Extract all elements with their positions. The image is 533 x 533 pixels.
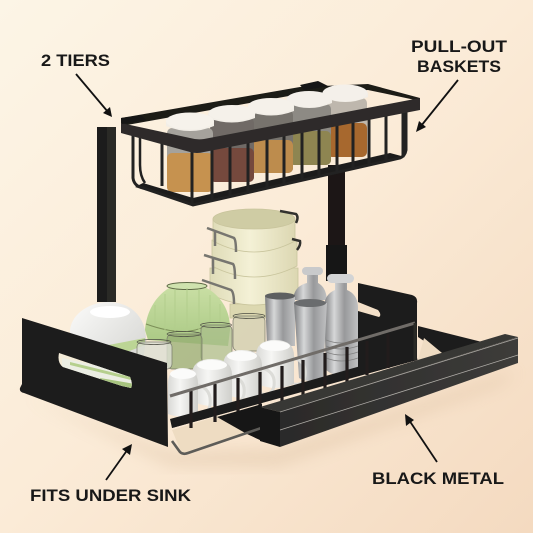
cup 2 <box>192 359 244 406</box>
upper basket bracket <box>121 115 146 124</box>
pot handles <box>202 211 300 304</box>
stacked cream pots <box>202 209 300 318</box>
label: pull-out baskets <box>411 37 508 132</box>
upper basket front rim <box>121 98 420 153</box>
left post <box>97 127 116 302</box>
arrow: black metal <box>405 414 437 462</box>
glass 4 <box>233 314 265 351</box>
cup 1 <box>168 368 210 417</box>
label: black metal <box>372 414 504 488</box>
green ribbed bowl <box>145 282 230 346</box>
lower basket back panel <box>358 283 417 376</box>
white cups <box>168 340 305 417</box>
jar 3 <box>248 98 294 173</box>
pull-out handle bar <box>172 425 270 454</box>
shaker front <box>324 274 358 376</box>
back panel handle cut-out <box>358 302 380 317</box>
white bowl <box>70 302 146 380</box>
floor liner beneath basket <box>172 416 270 454</box>
arrow: pull-out baskets <box>416 80 458 132</box>
front drawer bar <box>260 334 518 447</box>
jar 2 <box>208 105 256 182</box>
top rail <box>170 323 415 396</box>
lower basket dark floor <box>170 350 417 428</box>
glass 2 <box>167 332 202 369</box>
jar 5 <box>322 84 368 157</box>
pot 1 <box>213 209 295 252</box>
label: fits under sink <box>30 444 192 505</box>
floor shadow <box>25 370 518 465</box>
glass 1 <box>137 340 172 369</box>
label: 2 tiers: 2 TIERS <box>41 51 110 70</box>
cup 3 <box>223 350 274 398</box>
lower under-rail dark block <box>217 404 262 441</box>
label: pull-out baskets: BASKETS <box>417 57 501 76</box>
lower wire basket <box>170 323 417 428</box>
upper basket jars <box>166 84 368 192</box>
product: two-tier rack <box>20 81 518 454</box>
upper basket wire cage <box>133 108 406 205</box>
label: 2 tiers <box>41 51 112 117</box>
right post <box>326 165 347 281</box>
label: fits under sink: FITS UNDER SINK <box>30 486 192 505</box>
steel cup front <box>294 299 327 381</box>
cup 4 <box>256 340 305 388</box>
lower basket left end panel <box>20 318 168 447</box>
arrow: fits under sink <box>106 444 132 480</box>
silver shakers and cups <box>265 267 358 381</box>
upper basket back rim <box>121 81 420 126</box>
arrow: 2 tiers <box>76 74 112 117</box>
glass 3 <box>200 322 232 362</box>
pot 2 <box>212 240 297 277</box>
lower frame side rails <box>418 326 482 353</box>
handle cut-out showing bowl <box>58 353 132 388</box>
steel cup back <box>265 292 295 346</box>
glasses <box>137 314 265 369</box>
jar 4 <box>286 91 332 165</box>
label: pull-out baskets: PULL-OUT <box>411 37 508 56</box>
shaker back <box>293 267 327 300</box>
label: black metal: BLACK METAL <box>372 469 504 488</box>
pot 3 <box>210 268 298 318</box>
jar 1 <box>166 112 214 192</box>
